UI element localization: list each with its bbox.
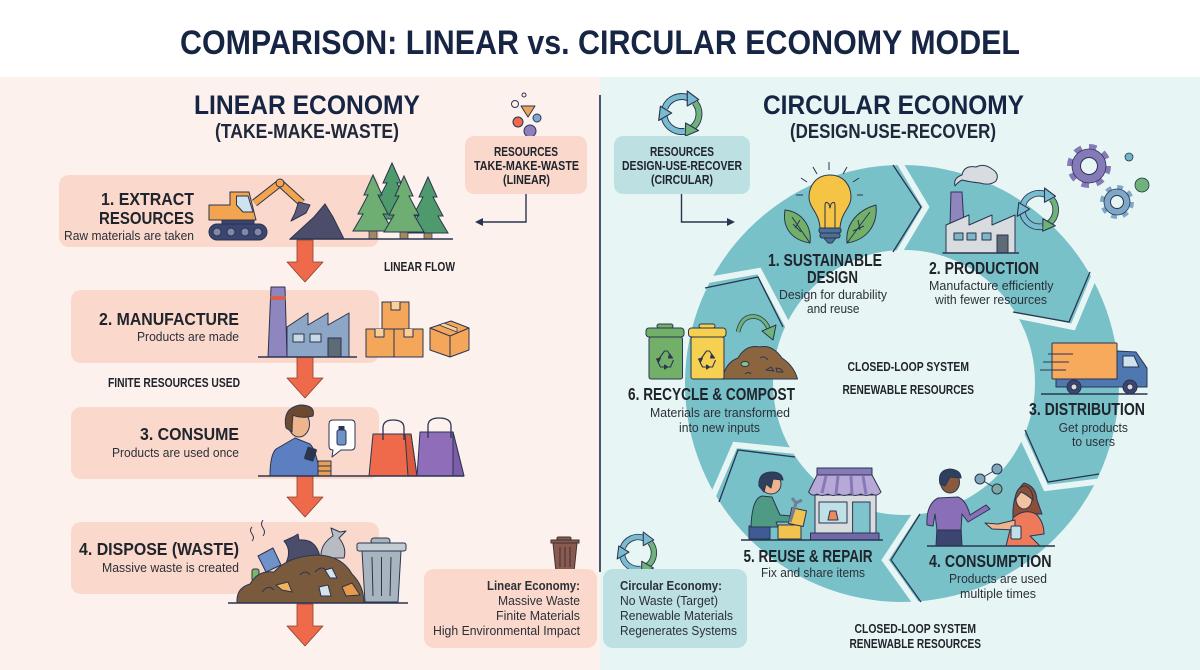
panel heading: circular economy: (DESIGN-USE-RECOVER) xyxy=(790,121,996,143)
step 1: extract resources: Raw materials are taken xyxy=(64,228,194,243)
step 6: recycle and compost: 6. RECYCLE & COMPOST xyxy=(628,384,795,404)
step 4: consumption: 4. CONSUMPTION xyxy=(929,551,1052,571)
step 4: dispose waste: 4. DISPOSE (WASTE) xyxy=(79,539,239,559)
step 2: production xyxy=(929,258,1054,307)
arrow: resources into linear flow xyxy=(475,194,526,226)
step 4: dispose waste: Massive waste is created xyxy=(102,560,239,575)
bottom label: closed loop and renewable: CLOSED-LOOP SYSTEM xyxy=(854,621,976,636)
step 1: sustainable design: 1. SUSTAINABLE xyxy=(768,250,882,270)
callout: resources circular: (CIRCULAR) xyxy=(651,172,713,187)
step 3: consume: 3. CONSUME xyxy=(140,424,239,444)
icon: small trash can xyxy=(551,537,579,572)
step 1: sustainable design xyxy=(768,250,887,316)
callout: circular economy summary: No Waste (Target) xyxy=(620,593,718,608)
callout: linear economy summary xyxy=(424,569,597,648)
step 6: recycle and compost xyxy=(628,384,795,435)
step 4: consumption: multiple times xyxy=(960,586,1036,601)
step 3: distribution: Get products xyxy=(1059,420,1128,435)
icon: delivery truck xyxy=(1040,343,1148,394)
step 6: recycle and compost: into new inputs xyxy=(679,420,760,435)
icon: recycle arrows bottom xyxy=(612,532,664,577)
step 2: manufacture xyxy=(71,290,379,363)
step 2: manufacture: 2. MANUFACTURE xyxy=(99,309,239,329)
center label: closed loop and renewable: RENEWABLE RESOURCES xyxy=(842,382,974,397)
panel heading: linear economy xyxy=(194,90,420,143)
icon: resource shapes xyxy=(512,93,541,137)
callout: circular economy summary: Renewable Materials xyxy=(620,608,733,623)
title: COMPARISON: LINEAR vs. CIRCULAR ECONOMY MODEL xyxy=(180,24,1020,62)
step 5: reuse and repair xyxy=(744,546,873,580)
step 6: recycle and compost: Materials are transformed xyxy=(650,405,790,420)
arrow: extract to manufacture xyxy=(287,240,323,282)
step 4: consumption xyxy=(929,551,1052,601)
callout: resources linear xyxy=(465,136,587,194)
icon: factory xyxy=(258,287,357,357)
step 3: distribution: to users xyxy=(1072,434,1115,449)
step 1: sustainable design: DESIGN xyxy=(807,267,858,287)
callout: circular economy summary: Regenerates Systems xyxy=(620,623,737,638)
step 2: production: Manufacture efficiently xyxy=(929,278,1054,293)
icon: shopping bags xyxy=(360,418,464,476)
panel heading: circular economy xyxy=(763,90,1024,143)
step 4: consumption: Products are used xyxy=(949,571,1047,586)
icon: recycle small near factory xyxy=(1012,188,1066,235)
panel heading: linear economy: (TAKE-MAKE-WASTE) xyxy=(215,121,399,143)
step 3: distribution xyxy=(1029,399,1145,449)
center label: closed loop and renewable xyxy=(842,359,974,397)
arrow: dispose out xyxy=(287,604,323,646)
center label: closed loop and renewable: CLOSED-LOOP SYSTEM xyxy=(848,359,969,374)
callout: linear economy summary: Linear Economy: xyxy=(487,578,580,593)
icon: green factory xyxy=(942,165,1019,253)
step 1: extract resources: 1. EXTRACT xyxy=(101,189,194,209)
panel heading: circular economy: CIRCULAR ECONOMY xyxy=(763,90,1024,120)
bottom label: closed loop and renewable xyxy=(850,621,981,651)
step 1: extract resources: RESOURCES xyxy=(99,208,194,228)
arrow: consume to dispose xyxy=(287,475,323,517)
chart: circular ring with six chevron segments xyxy=(685,160,1119,606)
icon: waste pile and bin xyxy=(228,520,408,603)
icon: stacked boxes xyxy=(366,302,469,357)
callout: resources circular: DESIGN-USE-RECOVER xyxy=(622,158,742,173)
step 2: manufacture: Products are made xyxy=(137,329,239,344)
step 1: sustainable design: and reuse xyxy=(807,301,860,316)
step 3: consume: Products are used once xyxy=(112,445,239,460)
arrow: manufacture to consume xyxy=(287,356,323,398)
icon: excavator xyxy=(209,179,310,240)
callout: resources linear: RESOURCES xyxy=(494,144,558,159)
icon: light bulb with leaves xyxy=(784,162,876,243)
icon: person with phone xyxy=(258,405,360,476)
step 1: sustainable design: Design for durability xyxy=(779,287,887,302)
callout: resources circular xyxy=(614,136,750,194)
step 1: extract resources xyxy=(59,175,379,247)
icon: repair person and shop xyxy=(741,468,883,540)
callout: linear economy summary: Massive Waste xyxy=(498,593,580,608)
icon: two people sharing xyxy=(927,464,1055,546)
panel heading: linear economy: LINEAR ECONOMY xyxy=(194,90,420,120)
label: finite resources used: FINITE RESOURCES USED xyxy=(108,375,240,390)
step 3: distribution: 3. DISTRIBUTION xyxy=(1029,399,1145,419)
callout: linear economy summary: High Environmental Impact xyxy=(433,623,580,638)
callout: circular economy summary: Circular Economy: xyxy=(620,578,722,593)
step 5: reuse and repair: Fix and share items xyxy=(761,565,865,580)
panel: circular economy background xyxy=(600,77,1200,670)
bottom label: closed loop and renewable: RENEWABLE RESOURCES xyxy=(850,636,981,651)
icon: recycle arrows top xyxy=(653,91,710,140)
step 3: consume xyxy=(71,407,379,479)
callout: resources circular: RESOURCES xyxy=(650,144,714,159)
step 5: reuse and repair: 5. REUSE & REPAIR xyxy=(744,546,873,566)
icon: mound and trees xyxy=(290,163,453,239)
step 2: production: with fewer resources xyxy=(934,292,1047,307)
arrow: resources into cycle xyxy=(682,194,735,226)
icon: gears xyxy=(1070,147,1149,216)
callout: circular economy summary xyxy=(603,569,747,648)
step 4: dispose waste xyxy=(71,522,379,594)
step 2: production: 2. PRODUCTION xyxy=(929,258,1039,278)
icon: recycle bins and compost xyxy=(646,317,798,379)
callout: resources linear: TAKE-MAKE-WASTE xyxy=(474,158,579,173)
callout: resources linear: (LINEAR) xyxy=(503,172,550,187)
label: linear flow: LINEAR FLOW xyxy=(384,259,456,274)
callout: linear economy summary: Finite Materials xyxy=(496,608,580,623)
background white header xyxy=(0,0,1200,77)
panel: linear economy background xyxy=(0,77,600,670)
